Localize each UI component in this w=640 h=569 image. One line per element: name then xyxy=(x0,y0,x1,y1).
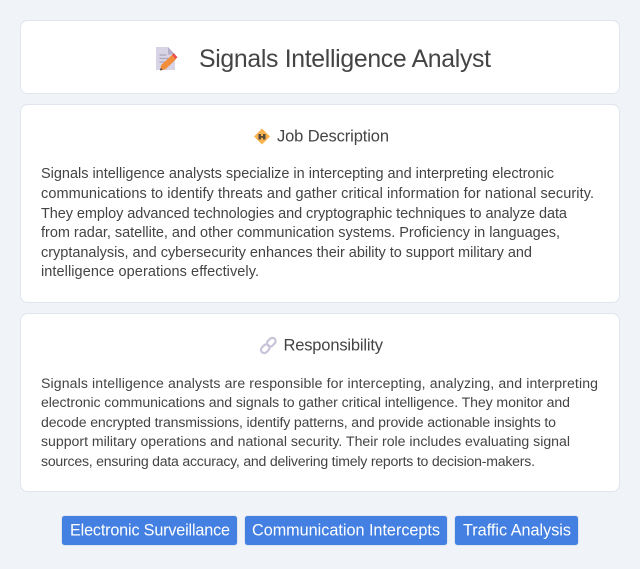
panel: title xyxy=(20,20,620,94)
text block: responsibility: support military operations and national security. Their role includes evaluating signal xyxy=(41,433,570,449)
text block: job description: Signals intelligence analysts specialize in intercepting and interpreting electronic xyxy=(41,166,554,182)
text block: job description: communications to identify threats and gather critical information for national security. xyxy=(41,186,594,202)
title text: Signals Intelligence Analyst xyxy=(199,46,491,73)
text block: job description: They employ advanced technologies and cryptographic techniques to analyze data xyxy=(41,206,568,222)
tag: Communication Intercepts: Communication Intercepts xyxy=(252,522,440,540)
tag: Electronic Surveillance: Electronic Surveillance xyxy=(70,522,230,540)
tag: Electronic Surveillance xyxy=(62,516,238,546)
tag: Traffic Analysis: Traffic Analysis xyxy=(463,522,571,540)
panel: responsibility xyxy=(20,314,620,492)
text block: responsibility: decode encrypted transmissions, identify patterns, and provide actionable insights to xyxy=(41,414,556,430)
text block: job description xyxy=(41,166,594,280)
heading: job description: Job Description xyxy=(277,128,389,146)
heading: responsibility: Responsibility xyxy=(284,336,384,354)
text block: job description: from radar, satellite, and other communication systems. Proficiency in languages, xyxy=(41,225,560,241)
text block: job description: cryptanalysis, and cybersecurity enhances their ability to support military and xyxy=(41,245,532,261)
text block: responsibility: electronic communications and signals to gather critical intelligence. They monitor and xyxy=(41,394,570,410)
panel: job description xyxy=(20,104,620,302)
text block: responsibility: Signals intelligence analysts are responsible for intercepting, analyzing, and interpreting xyxy=(41,375,598,391)
text block: responsibility: sources, ensuring data accuracy, and delivering timely reports to decision-makers. xyxy=(41,453,535,469)
text block: responsibility xyxy=(41,375,598,469)
tag: Traffic Analysis xyxy=(454,516,578,546)
icon: document with pencil xyxy=(156,47,178,70)
icon: chain link xyxy=(260,337,277,354)
text block: job description: intelligence operations effectively. xyxy=(41,264,259,280)
icon: orange diamond xyxy=(254,128,270,144)
tag: Communication Intercepts xyxy=(244,516,448,546)
